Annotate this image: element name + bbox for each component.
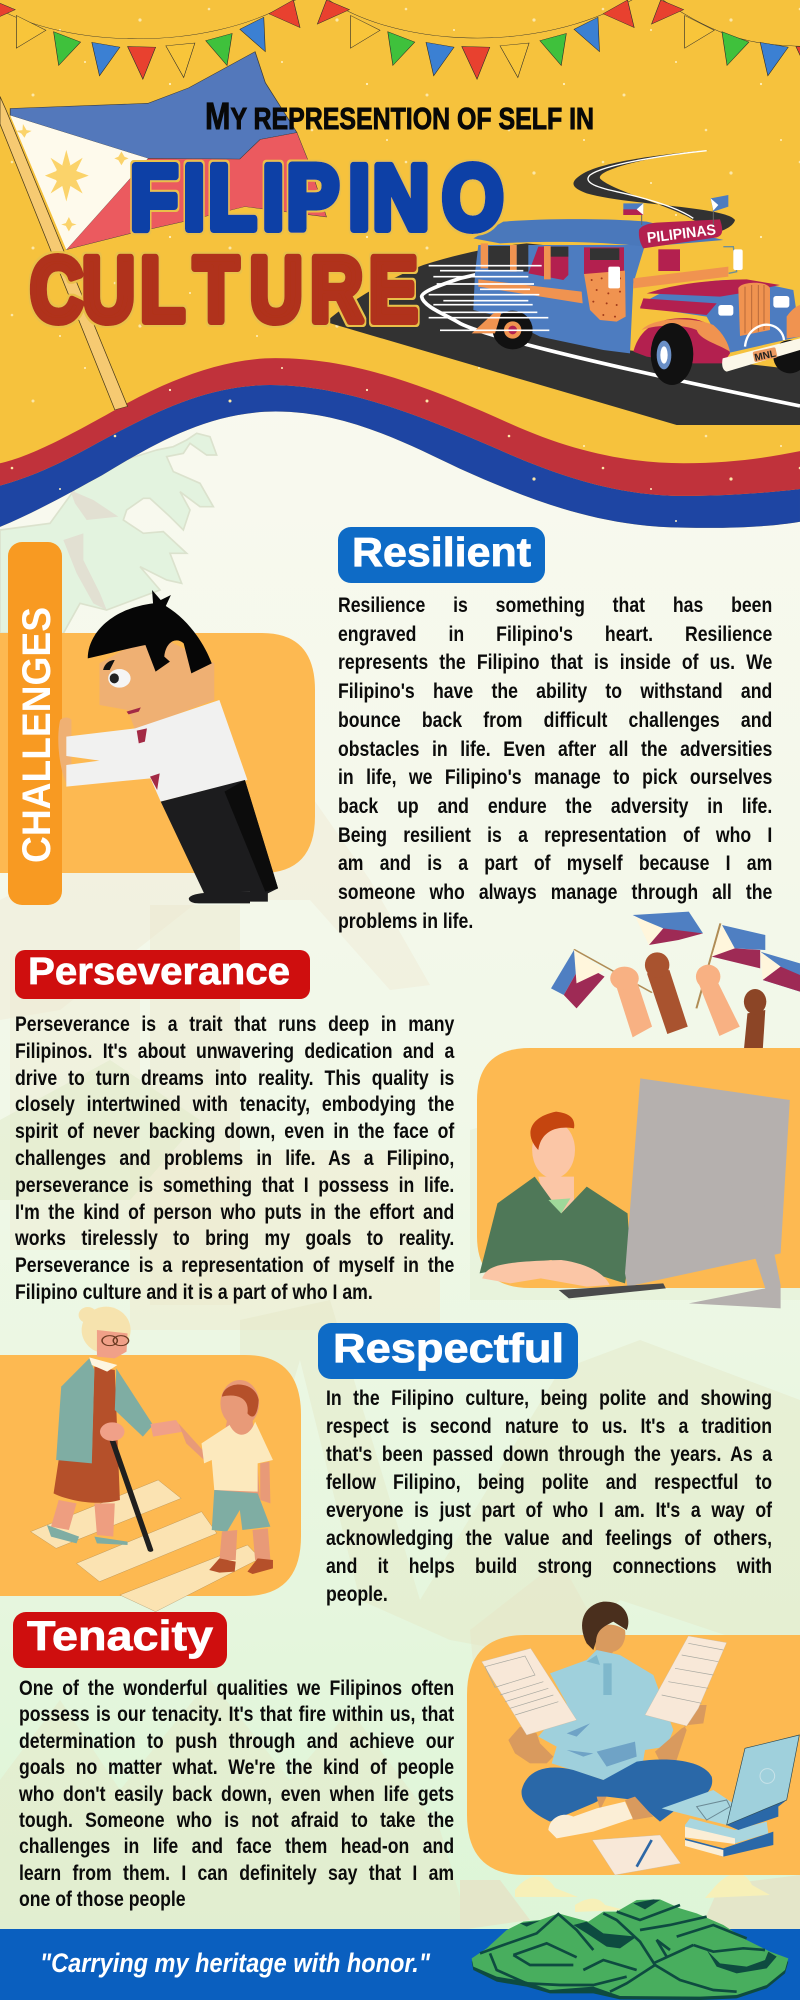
text block: perseverance: Filipinos. It's about unwavering dedication and a (15, 1040, 454, 1063)
footer quote: "Carrying my heritage with honor." (40, 1948, 431, 1978)
heading label: respectful (318, 1323, 578, 1379)
challenges side tab: CHALLENGES (15, 607, 59, 863)
footer band (0, 1929, 800, 2000)
text block: perseverance: Perseverance is a trait that runs deep in many (15, 1013, 454, 1036)
heading label: resilient (338, 527, 545, 583)
text block: respectful: In the Filipino culture, being polite and showing (326, 1387, 772, 1410)
text block: resilient: engraved in Filipino's heart. Resilience (338, 623, 772, 646)
text block: perseverance: challenges and problems in life. As a Filipino, (15, 1147, 454, 1170)
heading label: tenacity: Tenacity (27, 1612, 214, 1659)
text block: resilient: someone who always manage through all the (338, 881, 772, 904)
flag of the Philippines on pole (0, 52, 327, 410)
text block: tenacity: who don't easily back down, even when life gets (19, 1783, 454, 1806)
text block: perseverance: drive to turn dreams into reality. This quality is (15, 1067, 454, 1090)
text block: tenacity: tough. Someone who is not afraid to take the (19, 1809, 454, 1832)
text block: respectful: respect is second nature to us. It's a tradition (326, 1415, 772, 1438)
hands raising flags (551, 912, 800, 1050)
text block: tenacity: One of the wonderful qualities we Filipinos often (19, 1677, 454, 1700)
text block: resilient: am and is a part of myself because I am (338, 852, 772, 875)
figure: man working at a computer (480, 1078, 790, 1308)
text block: resilient: in life, we Filipino's manage to pick ourselves (338, 766, 772, 789)
text block: perseverance: Filipino culture and it is a part of who I am. (15, 1281, 373, 1304)
figure: person sitting cross-legged with papers and laptop (482, 1602, 799, 1875)
text block: respectful: people. (326, 1583, 388, 1606)
title word: CULTURE: CULTURE (30, 238, 418, 341)
text block: tenacity: possess is our tenacity. It's that fire within us, that (19, 1703, 454, 1726)
text block: respectful: acknowledging the value and feelings of others, (326, 1527, 772, 1550)
text block: perseverance: spirit of never backing down, even in the face of (15, 1120, 454, 1143)
text block: respectful: that's been passed down through the years. As a (326, 1443, 772, 1466)
text block: perseverance (15, 1013, 454, 1304)
icon: green mountains (472, 1899, 788, 2000)
text block: tenacity: determination to push through and achieve our (19, 1730, 454, 1753)
text block: resilient (338, 594, 772, 933)
title line: my represention of self in: MY REPRESENTION OF SELF IN (205, 96, 594, 138)
sign text: PILIPINAS (646, 221, 717, 247)
text block: resilient: Resilience is something that has been (338, 594, 772, 617)
plate text: MNL (754, 349, 777, 364)
text block: respectful: fellow Filipino, being polite and respectful to (326, 1471, 772, 1494)
text block: tenacity (19, 1677, 454, 1911)
faded background: palm, hut and hills (0, 433, 800, 1930)
text block: perseverance: closely intertwined with tenacity, embodying the (15, 1093, 454, 1116)
text block: tenacity: goals no matter what. We're the kind of people (19, 1756, 454, 1779)
header band: yellow field with red and blue waves (0, 0, 800, 528)
text block: perseverance: works tirelessly to bring my goals to reality. (15, 1227, 454, 1250)
text block: tenacity: one of those people (19, 1888, 186, 1911)
text block: resilient: problems in life. (338, 910, 473, 933)
challenges side tab (8, 542, 62, 905)
panel: orange backing for reading figure (467, 1635, 800, 1875)
text block: perseverance: Perseverance is a representation of myself in the (15, 1254, 454, 1277)
title word: FILIPINO: FILIPINO (130, 146, 504, 249)
paper speckle on header (0, 0, 800, 527)
text block: resilient: Filipino's have the ability to withstand and (338, 680, 772, 703)
panel: orange backing for resilient figure (0, 633, 315, 873)
text block: perseverance: I'm the kind of person who puts in the effort and (15, 1201, 454, 1224)
text block: respectful (326, 1387, 772, 1606)
text block: respectful: and it helps build strong connections with (326, 1555, 772, 1578)
panel: orange backing for computer figure (477, 1048, 800, 1288)
heading label: perseverance: Perseverance (28, 951, 290, 993)
text block: tenacity: learn from them. I can definitely say that I am (19, 1862, 454, 1885)
text block: resilient: Being resilient is a representation of who I (338, 824, 772, 847)
text block: resilient: back up and endure the adversity in life. (338, 795, 772, 818)
panel: orange backing for respect figures (0, 1355, 301, 1596)
heading label: resilient: Resilient (352, 529, 531, 575)
figure: child helping elderly woman cross (31, 1307, 273, 1612)
heading label: respectful: Respectful (333, 1325, 564, 1371)
text block: respectful: everyone is just part of who I am. It's a way of (326, 1499, 772, 1522)
text block: resilient: represents the Filipino that is inside of us. We (338, 651, 772, 674)
text block: resilient: bounce back from difficult challenges and (338, 709, 772, 732)
bunting (0, 0, 800, 79)
text block: perseverance: perseverance is something that I possess in life. (15, 1174, 454, 1197)
jeepney on winding road (326, 150, 800, 425)
heading label: tenacity (13, 1612, 227, 1668)
text block: tenacity: challenges in life and face them head-on and (19, 1835, 454, 1858)
text block: resilient: obstacles in life. Even after all the adversities (338, 738, 772, 761)
figure: man pushing against a wall (58, 590, 278, 903)
